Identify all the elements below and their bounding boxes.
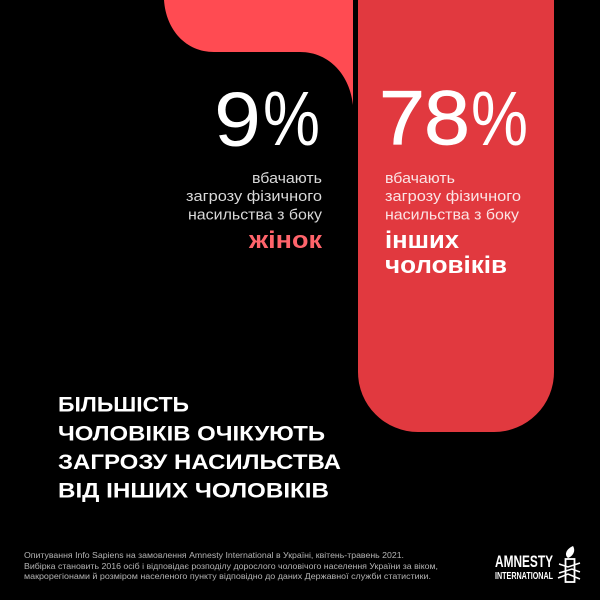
- highlight: other men: чоловіків: [385, 252, 507, 279]
- logo: Amnesty International: INTERNATIONAL: [495, 571, 553, 582]
- heading: [58, 392, 341, 502]
- description: men: вбачають: [385, 170, 455, 187]
- statistic: 9%: %: [263, 76, 320, 162]
- statistic: 78%: 7: [379, 76, 425, 162]
- statistic: 78%: [379, 76, 528, 162]
- description: women: [186, 170, 323, 224]
- description: men: [385, 170, 521, 224]
- logo: Amnesty International: AMNESTY: [495, 552, 553, 571]
- heading: ЗАГРОЗУ НАСИЛЬСТВА: [58, 450, 341, 474]
- statistic: 78%: %: [471, 76, 528, 162]
- statistic: 9%: 9: [214, 77, 261, 163]
- highlight: women: жінок: [248, 227, 323, 254]
- statistic: 9%: [214, 76, 320, 163]
- footnote: [24, 550, 438, 581]
- highlight: other men: інших: [385, 227, 460, 254]
- description: women: вбачають: [252, 170, 322, 187]
- description: women: насильства з боку: [188, 206, 323, 224]
- description: women: загрозу фізичного: [186, 188, 322, 205]
- statistic: 78%: 8: [424, 76, 470, 162]
- highlight: other men: [385, 227, 507, 279]
- footnote: макрорегіонами й розміром населеного пункту відповідно до даних Державної служби статистики.: [24, 571, 431, 581]
- red panel: other men: [358, 0, 554, 432]
- description: men: загрозу фізичного: [385, 188, 521, 205]
- footnote: Опитування Info Sapiens на замовлення Amnesty International в Україні, квітень-травень 2021.: [24, 550, 404, 560]
- speech bubble tail shape: [164, 0, 353, 105]
- heading: ВІД ІНШИХ ЧОЛОВІКІВ: [58, 478, 329, 502]
- footnote: Вибірка становить 2016 осіб і відповідає розподілу дорослого чоловічого населення України за віком,: [24, 561, 438, 571]
- logo: Amnesty International: [495, 546, 580, 582]
- heading: БІЛЬШІСТЬ: [58, 392, 189, 416]
- heading: ЧОЛОВІКІВ ОЧІКУЮТЬ: [58, 422, 325, 446]
- description: men: насильства з боку: [385, 206, 520, 224]
- icon: candle in barbed wire: [558, 546, 580, 582]
